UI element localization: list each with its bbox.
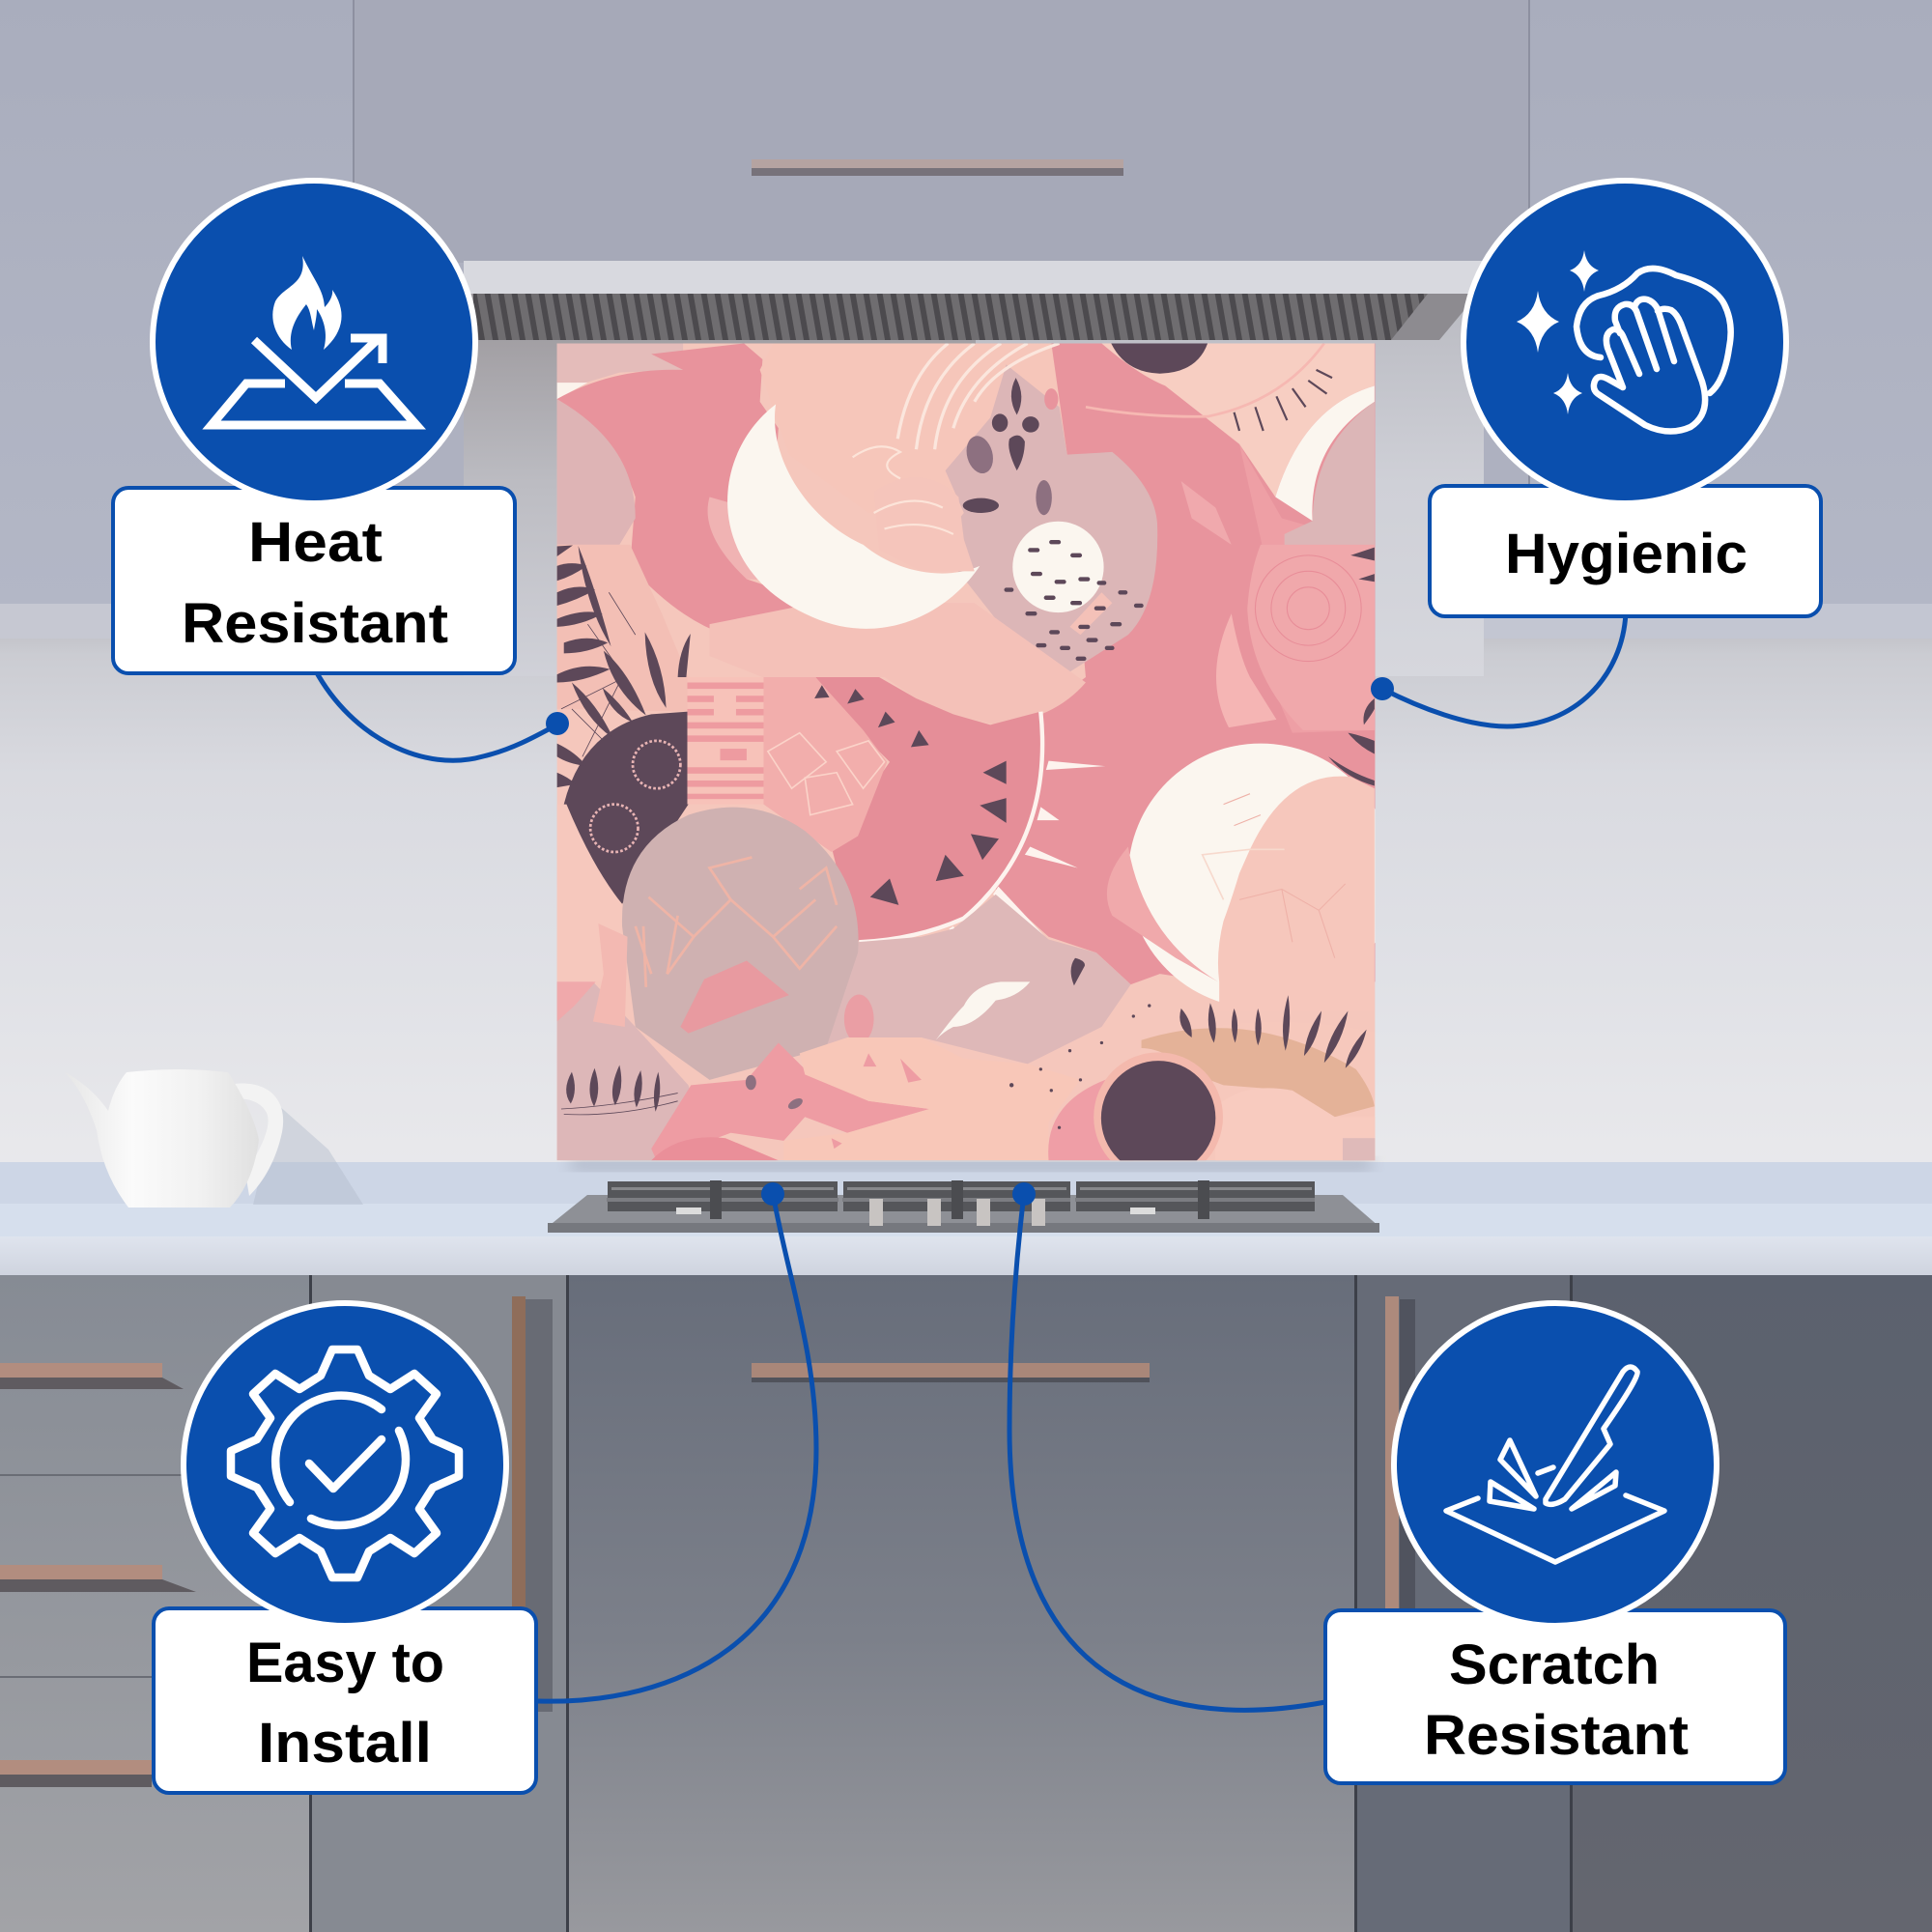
dark drops [963, 378, 1039, 513]
label text: Easy to [246, 1632, 444, 1694]
callout connector: Heat Resistant [315, 669, 569, 760]
bottom center pink blob [651, 1042, 929, 1160]
cabinet handles [0, 1296, 1415, 1787]
mauve blob [937, 364, 1157, 672]
watermelon [762, 677, 1042, 942]
label text: Resistant [182, 592, 448, 655]
right patterned circle [1247, 545, 1375, 730]
label box [1325, 1610, 1785, 1783]
white jug [65, 1069, 363, 1208]
icon circle [1463, 181, 1786, 503]
left dark spikes [557, 545, 691, 787]
icon circle [153, 181, 475, 503]
panel: pink abstract splashback artwork [556, 344, 1376, 1161]
label text: Install [258, 1712, 432, 1775]
icon circle [184, 1303, 506, 1626]
right cream circle [1128, 744, 1393, 1009]
bottom peach mottled [783, 1037, 1080, 1160]
callout connector: Hygienic [1371, 612, 1626, 726]
icon: gear with check mark [231, 1350, 459, 1577]
feature: Heat Resistant [113, 181, 515, 673]
watermelon seeds [814, 685, 1007, 905]
left dark sun disc [564, 712, 689, 904]
gray cracked circle [622, 808, 859, 1080]
cream dotted circle [1012, 522, 1104, 612]
label box [154, 1608, 536, 1793]
label box [113, 488, 515, 673]
label text: Scratch [1449, 1634, 1660, 1696]
wall [0, 604, 1932, 1174]
rose top-left shape [556, 344, 793, 628]
cooktop [548, 1180, 1379, 1233]
callout connector: Scratch Resistant [1009, 1182, 1325, 1710]
label text: Heat [248, 511, 383, 574]
top right peach sun [1101, 343, 1375, 497]
feature: Scratch Resistant [1325, 1303, 1785, 1783]
countertop [0, 1162, 1932, 1275]
lower left spikes [566, 1065, 660, 1112]
connector dot [1012, 1182, 1036, 1206]
watermelon rim and spikes [859, 712, 1105, 998]
bottom right orange arch [1112, 1022, 1375, 1160]
label text: Hygienic [1505, 523, 1747, 585]
top right crescent [1275, 385, 1375, 521]
connector dot [761, 1182, 784, 1206]
white squiggle [936, 981, 1030, 1040]
top right dark half circle [1111, 343, 1208, 374]
upper cabinet handle [752, 159, 1123, 176]
connector dot [1371, 677, 1394, 700]
feature: Easy to Install [154, 1303, 536, 1793]
range hood [464, 261, 1484, 340]
upper peach circle [759, 344, 1067, 454]
white arcs [897, 343, 1060, 449]
label box [1430, 486, 1821, 616]
upper cabinets [0, 0, 1932, 639]
rose background right [996, 343, 1378, 984]
icon circle [1394, 1303, 1717, 1626]
striped square [688, 677, 763, 805]
feature: Hygienic [1430, 181, 1821, 616]
label text [182, 511, 448, 655]
connector dot [546, 712, 569, 735]
cream crescent [727, 405, 980, 629]
gray lower area [826, 895, 1131, 1064]
lower cabinets [0, 1275, 1932, 1932]
pale rose over crescent [708, 497, 815, 582]
label text [1424, 1634, 1689, 1767]
callout connector: Easy to Install [538, 1182, 816, 1701]
label text [246, 1632, 444, 1775]
icon: flame over surface with rebound arrow [212, 256, 416, 425]
lower left gray [557, 981, 710, 1160]
right peach overlay [1218, 777, 1375, 1011]
bottom right spikes [1179, 995, 1367, 1068]
icon: knife scratching surface [1446, 1367, 1664, 1562]
peach center band [710, 603, 1086, 724]
top-left mauve corner [557, 344, 683, 383]
squiggle shape [874, 477, 975, 571]
label text: Resistant [1424, 1704, 1689, 1767]
lower-left peach fill [557, 805, 622, 981]
left mauve circle [557, 399, 636, 545]
icon: hand wiping with sparkles [1517, 250, 1731, 432]
right dark spikes [1328, 548, 1375, 785]
